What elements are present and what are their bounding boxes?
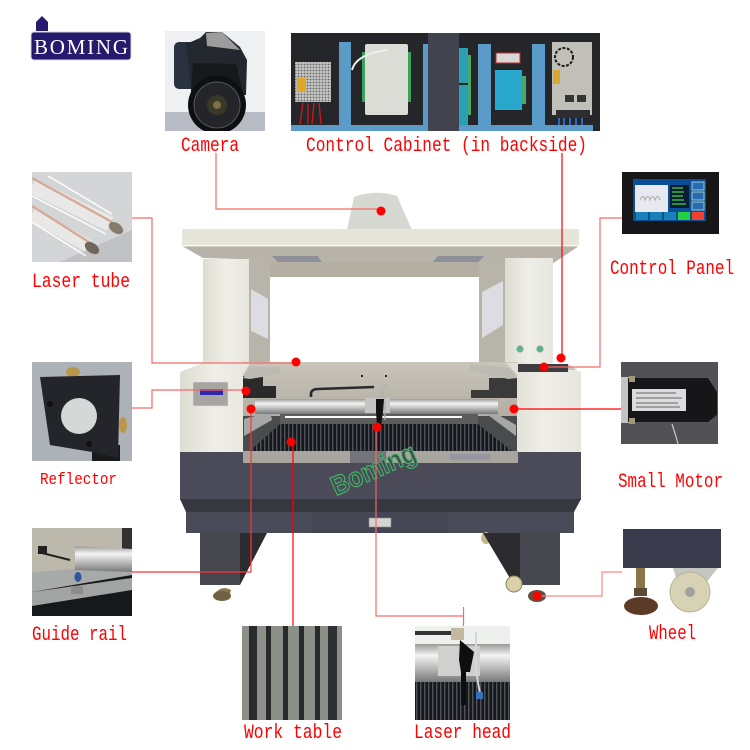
label: Wheel: Wheel <box>649 623 696 646</box>
work table bed <box>250 424 512 451</box>
leader: work table <box>292 442 294 626</box>
photo: work table <box>242 626 342 720</box>
photo: small motor <box>621 362 718 444</box>
label: Camera: Camera <box>181 135 239 158</box>
photo: control cabinet <box>291 33 600 131</box>
stainless front strip <box>243 451 518 463</box>
photo: guide rail <box>32 528 132 616</box>
label: Control Cabinet: Control Cabinet (in backside) <box>306 135 587 158</box>
photo: laser tube <box>32 172 132 262</box>
carriage and laser head <box>365 385 390 426</box>
photo: laser head <box>415 626 510 720</box>
photo: control panel <box>622 172 719 234</box>
side rails <box>244 410 516 436</box>
label: Laser head: Laser head <box>414 722 511 745</box>
body side panels <box>180 363 581 452</box>
gantry beam <box>255 399 498 414</box>
leader lines <box>132 153 622 626</box>
window band and left column <box>203 259 479 364</box>
camera housing on top <box>347 193 412 230</box>
leader: control panel <box>544 218 622 367</box>
photo: wheel <box>623 529 721 615</box>
control screen on body <box>518 364 568 372</box>
right column <box>479 258 553 364</box>
leader: laser tube <box>132 218 296 363</box>
machine illustration <box>180 193 581 602</box>
leader: laser head <box>376 427 464 626</box>
label: Guide rail: Guide rail <box>32 624 127 647</box>
label: Small Motor: Small Motor <box>618 471 723 494</box>
leader: guide rail <box>132 409 251 572</box>
leader: control cabinet <box>561 153 563 358</box>
bed area behind gantry <box>280 414 478 425</box>
photo: camera <box>165 31 265 131</box>
nameplate <box>193 382 228 406</box>
label: Laser tube: Laser tube <box>32 271 130 294</box>
leader: small motor <box>514 408 621 410</box>
marker dots <box>242 206 566 600</box>
back wall of bed <box>243 362 518 452</box>
photo: reflector <box>32 362 132 461</box>
leader: reflector <box>132 390 246 408</box>
leader: wheel <box>537 572 622 596</box>
label: Work table: Work table <box>244 722 342 745</box>
label: Reflector: Reflector <box>40 471 117 490</box>
watermark: Boming: Boming <box>326 437 421 501</box>
left leg <box>200 533 267 601</box>
right leg with casters <box>481 532 560 602</box>
lower cabinet <box>180 452 581 533</box>
logo: Boming <box>31 16 131 60</box>
leader: camera <box>216 153 381 209</box>
logo: Boming: BOMING <box>34 35 128 59</box>
gantry roof <box>182 229 579 273</box>
